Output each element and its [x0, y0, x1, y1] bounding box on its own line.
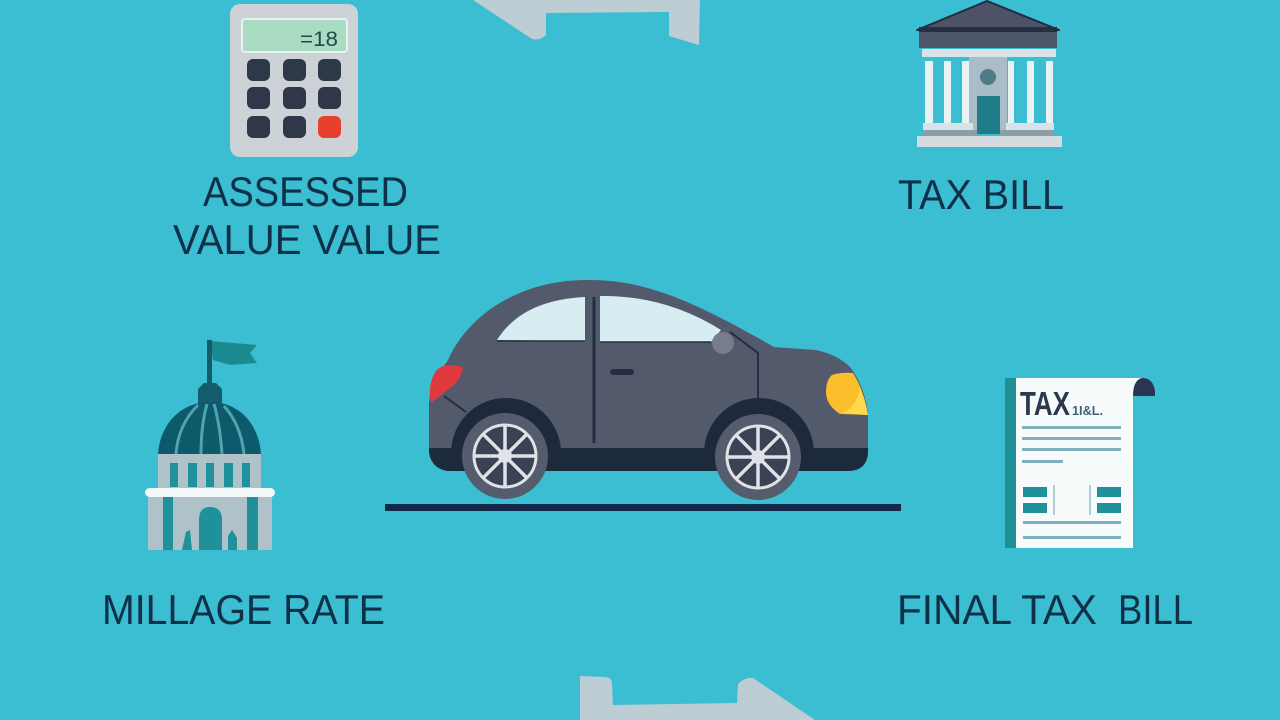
icon: tax document: 1I&L. — [1072, 403, 1103, 418]
calculator screen — [242, 19, 347, 52]
rear window — [497, 297, 585, 341]
calculator readout: =18 — [300, 28, 338, 51]
car sill — [429, 448, 868, 471]
heading: final tax bill: FINAL TAX — [897, 586, 1097, 633]
icon: car — [429, 280, 868, 500]
mirror — [712, 332, 734, 354]
icon: bank building — [917, 1, 1062, 147]
tail light — [430, 365, 463, 403]
heading: millage rate: MILLAGE RATE — [102, 586, 385, 633]
heading: final tax bill — [897, 586, 1193, 633]
front window — [600, 296, 721, 342]
arrow: top — [473, 0, 700, 45]
heading: final tax bill: BILL — [1118, 586, 1193, 633]
car body — [429, 280, 868, 452]
heading: tax bill: TAX BILL — [898, 171, 1064, 218]
headlight — [826, 373, 868, 415]
icon: calculator — [230, 4, 358, 157]
ground line — [385, 504, 901, 511]
door lines — [444, 297, 758, 443]
document title: TAX — [1020, 385, 1070, 422]
heading: assessed value: ASSESSED — [203, 168, 408, 215]
door handle — [610, 369, 634, 375]
icon: capitol building — [145, 340, 275, 550]
heading: assessed value: VALUE VALUE — [173, 216, 441, 263]
heading: assessed value — [173, 168, 441, 263]
arrow: bottom — [580, 676, 815, 720]
rear wheel — [451, 398, 561, 499]
calculator keys — [247, 59, 341, 138]
icon: tax document — [1005, 378, 1155, 548]
front wheel — [704, 398, 814, 500]
